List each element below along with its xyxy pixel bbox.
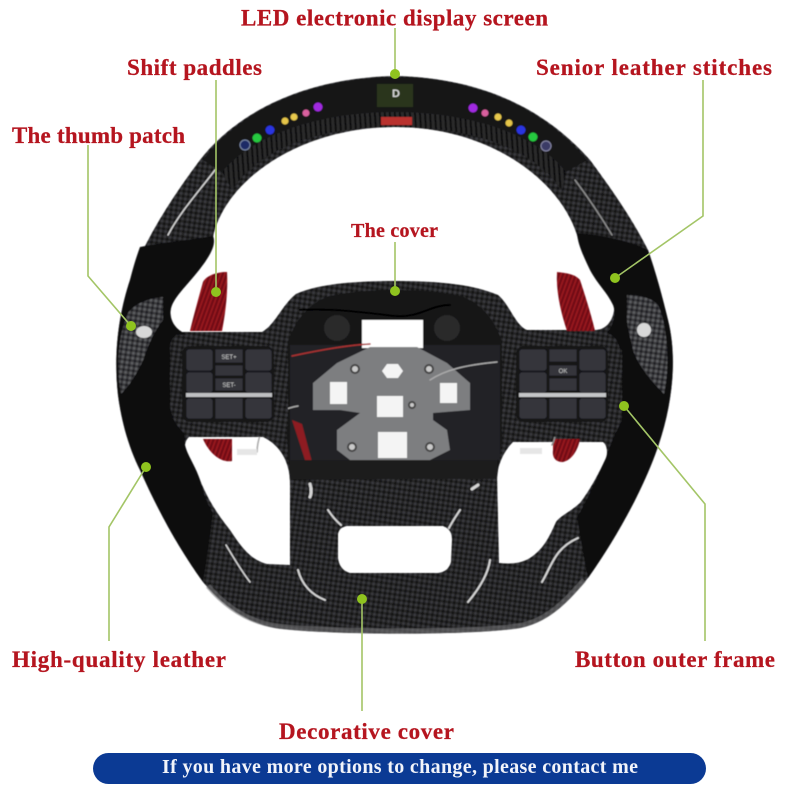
plate bolts — [348, 365, 434, 451]
red inner paddle — [292, 420, 312, 462]
hub white opening — [362, 320, 423, 348]
callout: Shift paddles: Shift paddles — [127, 55, 262, 80]
left button panel: SET+ — [221, 355, 237, 361]
callout: The thumb patch — [12, 123, 185, 331]
callout: The cover — [351, 220, 438, 296]
LED display screen — [377, 84, 413, 107]
red centre stripe — [381, 117, 412, 125]
upper left paddle — [190, 272, 227, 331]
callout: High-quality leather: High-quality leather — [12, 647, 226, 672]
thumb patch left glint — [136, 326, 152, 338]
contact banner: If you have more options to change, please contact me — [162, 756, 638, 778]
upper right paddle — [557, 272, 595, 331]
callout: Senior leather stitches — [536, 55, 772, 283]
glossy LED band — [203, 77, 587, 172]
right button panel: OK — [559, 369, 567, 375]
plate cut-outs — [330, 364, 457, 458]
contact banner — [93, 753, 706, 784]
callout: The cover: The cover — [351, 220, 438, 242]
thumb patch right glint — [637, 323, 651, 337]
white clips under panels — [237, 448, 542, 455]
thumb patch left — [118, 297, 163, 394]
wheel body: carbon frame — [116, 76, 673, 634]
right LED strip — [468, 104, 551, 151]
callout: High-quality leather — [12, 462, 226, 672]
right button panel frame — [503, 333, 620, 437]
callout: LED electronic display screen — [241, 6, 548, 79]
rubber mounts — [324, 315, 460, 341]
lower hub dark — [290, 460, 497, 479]
callout: Decorative cover — [279, 594, 454, 744]
hub interior — [287, 290, 502, 480]
callout: Senior leather stitches: Senior leather stitches — [536, 55, 772, 80]
lower left paddle — [203, 439, 232, 461]
metal centre plate — [313, 347, 470, 460]
left LED strip — [240, 102, 322, 150]
bottom edge highlight — [208, 580, 584, 631]
right button panel — [516, 346, 608, 422]
wiring — [257, 305, 568, 452]
thumb patch right — [627, 295, 667, 394]
callout: The thumb patch: The thumb patch — [12, 123, 185, 148]
callout: Decorative cover: Decorative cover — [279, 719, 454, 744]
inner stitched rim strip — [222, 112, 566, 190]
lower right paddle — [553, 439, 580, 462]
LED display screen: D — [392, 88, 400, 100]
callout: Button outer frame: Button outer frame — [575, 647, 775, 672]
carbon glints — [168, 170, 612, 602]
callout: Button outer frame — [575, 401, 775, 672]
left button panel — [182, 346, 274, 422]
callout: LED electronic display screen: LED electronic display screen — [241, 6, 548, 30]
left button panel: SET- — [222, 383, 236, 389]
steering wheel — [116, 76, 673, 634]
suede right grip — [577, 233, 673, 578]
callout: Shift paddles — [127, 55, 262, 297]
suede left grip — [116, 236, 214, 582]
left button panel frame — [170, 333, 288, 437]
translucent grey overlay — [290, 345, 500, 460]
